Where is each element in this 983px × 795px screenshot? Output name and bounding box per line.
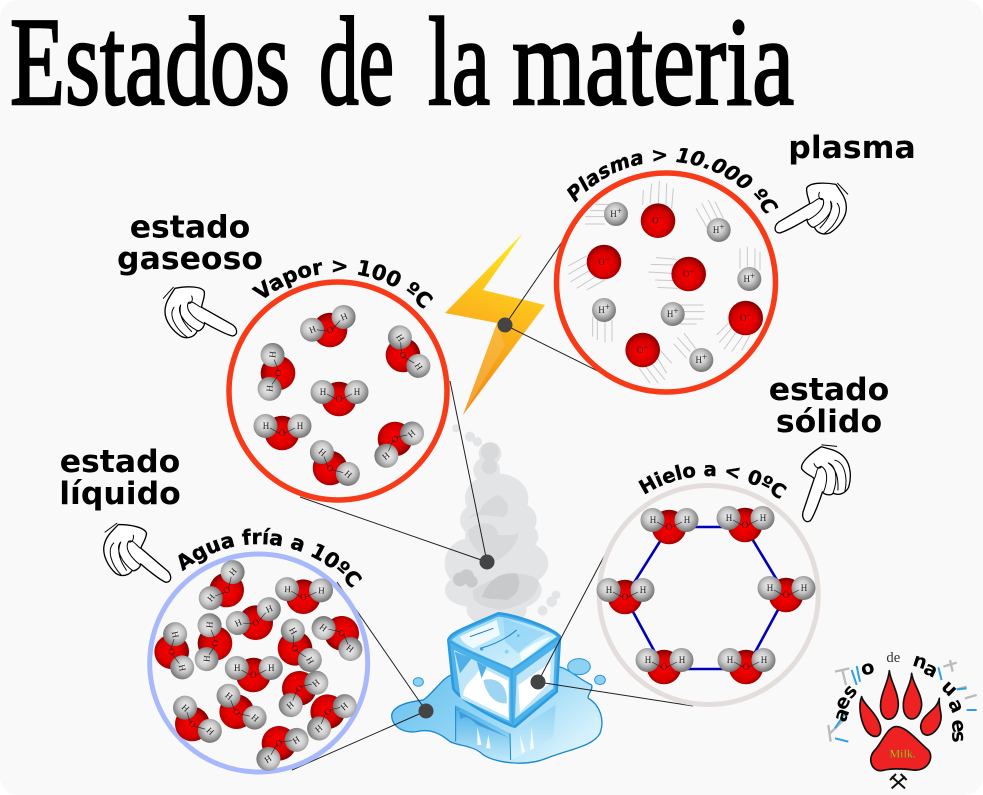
- connector lines: [292, 210, 693, 770]
- logo lettering: n: [910, 648, 930, 674]
- gas molecules: O: [389, 433, 401, 445]
- oxygen ions: −: [746, 310, 751, 320]
- logo lettering: a: [943, 695, 970, 717]
- gas molecules: H: [413, 361, 425, 372]
- ice molecules: O: [666, 522, 673, 532]
- vapor curved caption: Vapor > 100 ºC: [252, 260, 434, 309]
- cube reflection: [455, 705, 556, 760]
- gas molecules: H: [263, 421, 270, 431]
- liquid molecules: H: [310, 677, 322, 689]
- vapor ring: [229, 282, 447, 500]
- liquid molecules: H: [317, 621, 329, 634]
- liquid molecules: H: [177, 664, 188, 673]
- ice molecules: H: [726, 513, 733, 523]
- heading: estado sólido: estado: [769, 372, 889, 408]
- liquid molecules: H: [344, 642, 356, 655]
- plasma motion streaks: [568, 181, 760, 383]
- liquid molecules: H: [204, 725, 216, 737]
- ice molecules: H: [650, 515, 657, 525]
- liquid molecules: O: [336, 627, 347, 639]
- liquid molecules: H: [223, 690, 235, 702]
- liquid molecules: O: [322, 706, 333, 718]
- oxygen ions: [587, 203, 763, 367]
- gas molecules: H: [339, 311, 349, 323]
- ice molecules: O: [661, 662, 668, 672]
- oxygen ions: O: [683, 269, 689, 279]
- hydrogen ions: +: [719, 222, 724, 232]
- heading: estado líquido: estado: [60, 444, 180, 480]
- logo lettering: a: [828, 705, 854, 725]
- title: [10, 0, 794, 132]
- liquid molecules: H: [227, 566, 239, 577]
- liquid molecules: H: [313, 723, 324, 735]
- ice molecules: H: [606, 585, 613, 595]
- heading: estado sólido: sólido: [776, 404, 882, 440]
- gas molecules: H: [308, 323, 318, 335]
- logo hammers: [890, 774, 907, 788]
- logo lettering: o: [858, 655, 877, 681]
- liquid molecules: O: [273, 737, 284, 750]
- ice molecules: O: [622, 592, 629, 602]
- gas molecules: H: [406, 428, 417, 440]
- panel: gas: [226, 260, 450, 503]
- plasma ring: [556, 173, 776, 392]
- liquid molecules: H: [318, 585, 325, 595]
- logo lettering: u: [937, 675, 963, 701]
- oxygen ions: O: [740, 313, 746, 323]
- melting ice cube and puddle: [392, 613, 605, 763]
- gas molecules: H: [354, 387, 361, 397]
- liquid molecules: O: [251, 617, 261, 629]
- heading: estado gaseoso: gaseoso: [117, 241, 263, 277]
- gas molecules: H: [380, 450, 392, 462]
- oxygen ions: O: [598, 257, 605, 267]
- ice molecules: H: [761, 655, 768, 665]
- liquid molecules: H: [284, 699, 296, 712]
- hydrogen ions: H: [667, 309, 673, 319]
- hydrogen ions: +: [750, 271, 755, 281]
- ice molecules: O: [783, 590, 790, 600]
- ice molecules: H: [679, 655, 686, 665]
- gas molecules: O: [273, 369, 283, 377]
- heading: estado gaseoso: estado: [130, 210, 250, 246]
- logo lettering: e: [829, 691, 855, 714]
- hydrogen ions: H: [713, 225, 719, 235]
- liquid molecules: H: [264, 603, 275, 615]
- plasma curved caption: Plasma > 10.000 ºC: [566, 148, 778, 214]
- liquid molecules: H: [290, 734, 302, 746]
- ice molecules: H: [684, 515, 691, 525]
- oxygen ions: O: [652, 216, 659, 226]
- water droplets: [413, 659, 605, 686]
- ice cube: [448, 613, 560, 727]
- icon: hand pointing at liquid: [97, 521, 179, 585]
- logo lettering: [828, 648, 977, 743]
- ice curved caption: Hielo a < 0ºC: [638, 464, 787, 499]
- gas molecules: O: [324, 462, 336, 474]
- logo lettering: s: [837, 680, 862, 703]
- oxygen ions: −: [605, 254, 610, 264]
- gas molecules: [254, 301, 435, 500]
- gas molecules: O: [336, 394, 343, 404]
- hydrogen ions: H: [610, 209, 617, 219]
- ice molecules: H: [801, 583, 808, 593]
- liquid molecules: H: [180, 702, 192, 714]
- liquid molecules: O: [187, 718, 198, 730]
- logo lettering: s: [947, 730, 971, 743]
- gas molecules: H: [264, 384, 275, 392]
- puddle: [392, 667, 602, 763]
- gas molecules: H: [320, 387, 327, 397]
- liquid molecules: O: [221, 584, 233, 596]
- logo signature: Milk.: [890, 746, 916, 760]
- liquid molecules: H: [249, 712, 261, 724]
- heading: estado líquido: líquido: [59, 476, 181, 512]
- ice ring: [599, 486, 818, 704]
- hydrogen ions: H: [696, 355, 702, 365]
- panel: plasma: [554, 148, 778, 395]
- ice molecules: H: [645, 655, 652, 665]
- lightning bolt: [445, 233, 545, 415]
- logo lettering: a: [920, 656, 942, 683]
- hydrogen ions: +: [702, 352, 707, 362]
- logo lettering: de: [886, 650, 900, 666]
- liquid molecules: H: [338, 701, 350, 713]
- liquid molecules: H: [170, 630, 181, 639]
- smoke cloud: [445, 424, 560, 627]
- ice molecules: H: [767, 583, 774, 593]
- oxygen ions: −: [689, 266, 694, 276]
- gas molecules: O: [325, 324, 335, 336]
- gas molecules: H: [394, 332, 406, 344]
- icon: hand pointing at solid: [775, 438, 863, 525]
- hydrogen ions: +: [673, 306, 678, 316]
- liquid molecules: O: [231, 706, 243, 718]
- logo paw: [860, 671, 941, 771]
- liquid molecules: H: [284, 584, 291, 594]
- hydrogen ions: [592, 202, 761, 372]
- heading: plasma: plasma: [788, 130, 916, 166]
- liquid molecules: H: [201, 654, 212, 662]
- gas molecules: O: [279, 428, 286, 438]
- hydrogen ions: +: [617, 206, 622, 216]
- icon: hand pointing at plasma: [774, 183, 848, 235]
- liquid molecules: O: [250, 670, 257, 680]
- liquid molecules: H: [304, 655, 316, 666]
- water ring: [150, 554, 368, 772]
- connector dots: [418, 318, 546, 718]
- gas molecules: H: [343, 468, 354, 480]
- liquid molecules: H: [233, 617, 244, 629]
- liquid molecules: O: [289, 643, 301, 654]
- icon: hand pointing at gas: [163, 287, 237, 338]
- liquid molecules: O: [166, 647, 177, 656]
- ice molecules: [596, 506, 816, 684]
- panel: solid: [596, 464, 821, 707]
- liquid molecules: H: [234, 663, 241, 673]
- oxygen ions: O: [637, 345, 643, 355]
- ice molecules: H: [760, 513, 767, 523]
- ice molecules: O: [742, 520, 749, 530]
- liquid molecules: H: [205, 592, 217, 603]
- liquid molecules: H: [204, 621, 215, 628]
- hydrogen ions: H: [744, 274, 750, 284]
- oxygen ions: −: [659, 213, 664, 223]
- logo lettering: e: [946, 717, 971, 734]
- hydrogen ions: +: [605, 302, 610, 312]
- hexagonal lattice: [625, 527, 786, 669]
- oxygen ions: −: [643, 342, 648, 352]
- gas molecules: H: [317, 446, 328, 459]
- liquid molecules: H: [268, 663, 275, 673]
- liquid molecules: H: [287, 626, 299, 637]
- ice molecules: O: [743, 662, 750, 672]
- gas molecules: H: [267, 350, 278, 358]
- gas molecules: O: [397, 350, 409, 361]
- water curved caption: Agua fría a 10ºC: [178, 528, 362, 588]
- ice molecules: H: [640, 585, 647, 595]
- panel: liquid: [147, 528, 370, 774]
- liquid molecules: H: [262, 753, 273, 765]
- logo: Maestro de naturales: [828, 648, 977, 788]
- liquid molecules: [149, 555, 375, 776]
- liquid molecules: O: [300, 592, 307, 602]
- gas molecules: H: [297, 421, 304, 431]
- liquid molecules: O: [293, 682, 305, 695]
- ice molecules: H: [727, 655, 734, 665]
- hydrogen ions: H: [598, 305, 605, 315]
- liquid molecules: O: [210, 639, 220, 647]
